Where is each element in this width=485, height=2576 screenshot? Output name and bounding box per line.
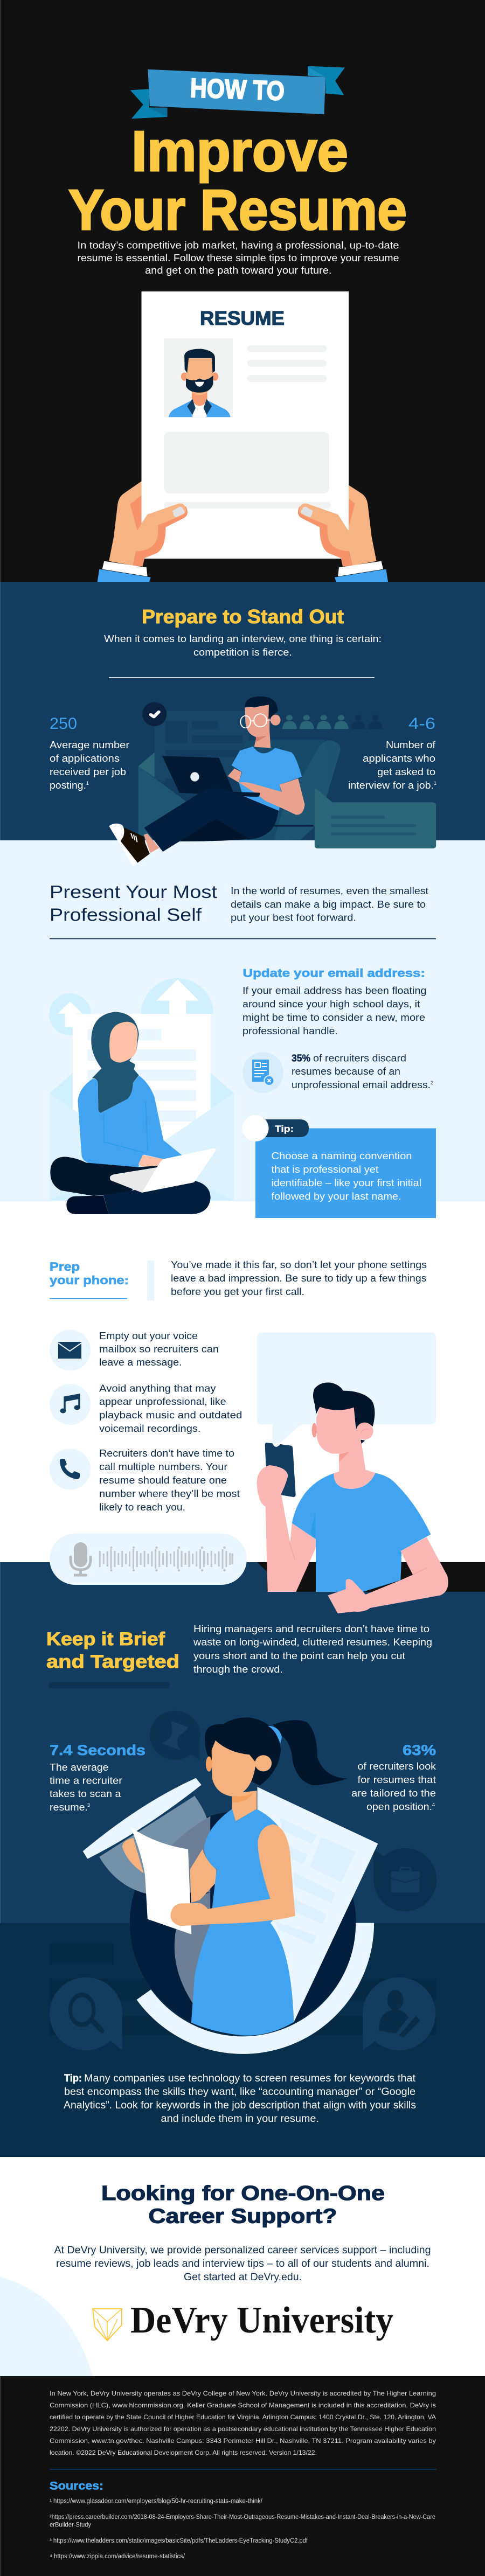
stat: 250: posting. <box>50 780 86 791</box>
intro text: In the world of resumes, even the smallest <box>231 886 428 896</box>
illustration: email envelope and woman <box>49 978 234 1214</box>
legal text <box>50 2390 436 2456</box>
stat: 250 <box>50 715 129 791</box>
intro text <box>193 1624 432 1675</box>
stat: 250: 1 <box>86 781 89 786</box>
stat text: 35%: 35% <box>292 1053 310 1063</box>
illustration: man with laptop <box>109 697 436 866</box>
bubble icons: search and candidate <box>50 1978 435 2050</box>
heading: Prepare to Stand Out <box>142 605 344 628</box>
intro text: competition is fierce. <box>193 647 292 658</box>
subheading: your phone: <box>50 1273 129 1287</box>
icon: candidate bubble <box>363 1978 435 2050</box>
legal text: Commission, www.tn.gov/thec. Nashville Campus: 3343 Perimeter Hill Dr., Nashville, TN 37211. Program availability varies by <box>50 2437 436 2445</box>
ribbon banner <box>130 66 345 119</box>
tip card <box>242 1115 436 1218</box>
heading: Professional Self <box>50 905 202 924</box>
stat: 63%: are tailored to the <box>351 1788 436 1799</box>
stat: 4-6: 4-6 <box>408 715 435 733</box>
item: music <box>50 1383 242 1434</box>
stat: 63% <box>351 1742 436 1812</box>
hourglass shape <box>83 1778 210 2004</box>
illustration: woman with resume <box>83 1711 436 2054</box>
tip text: best encompass the skills they want, like “accounting manager” or “Google <box>64 2086 415 2098</box>
check badge <box>142 702 167 726</box>
stat: 63%: of recruiters look <box>358 1761 436 1772</box>
panel: present your most professional self <box>0 840 485 1201</box>
stat text: 35%: 2 <box>431 1080 433 1085</box>
sources heading: Sources: <box>50 2480 103 2493</box>
ring arc <box>137 1923 374 2054</box>
sources list <box>50 2498 435 2560</box>
tip card: Tip: <box>275 1124 294 1134</box>
stat: 63%: 4 <box>432 1802 435 1807</box>
stat: 7.4 seconds: 3 <box>87 1802 90 1808</box>
tip text: Tip: <box>64 2073 82 2084</box>
decorative corner shape <box>0 2276 93 2376</box>
panel: header <box>68 66 407 582</box>
tip text: Many companies use technology to screen resumes for keywords that <box>84 2073 416 2084</box>
logo: DeVry University: DeVry University <box>130 2300 393 2341</box>
body text: If your email address has been floating <box>242 985 427 996</box>
item: voicemail: Empty out your voice <box>99 1331 198 1341</box>
intro text: through the crowd. <box>193 1664 283 1675</box>
intro text: and get on the path toward your future. <box>145 265 332 276</box>
heading <box>101 2182 385 2228</box>
tip card: that is professional yet <box>272 1164 378 1175</box>
heading: Present Your Most <box>50 882 217 902</box>
voice message bar <box>50 1534 247 1585</box>
stat: 4-6: Number of <box>386 740 436 750</box>
heading: Looking for One-On-One <box>101 2182 385 2205</box>
stat: 4-6: interview for a job. <box>348 780 434 791</box>
item: music: Avoid anything that may <box>99 1383 216 1394</box>
avatar portrait <box>169 349 231 417</box>
title: Your Resume <box>68 178 407 242</box>
stat: 7.4 seconds: resume. <box>50 1802 88 1813</box>
stat: 63%: for resumes that <box>358 1774 436 1785</box>
applicant row <box>282 715 383 729</box>
icon: hourglass bubble <box>150 1711 200 1760</box>
intro text: waste on long-winded, cluttered resumes. Keeping <box>193 1637 432 1647</box>
item: voicemail: mailbox so recruiters can <box>99 1343 219 1354</box>
stat: 250: 250 <box>50 715 77 733</box>
stat text: 35%: of recruiters discard <box>313 1053 406 1063</box>
stat: 4-6 <box>348 715 436 791</box>
heading <box>46 1629 179 1688</box>
intro text: Hiring managers and recruiters don’t have time to <box>193 1624 429 1634</box>
resume paper: RESUME <box>200 307 285 329</box>
legal text: In New York, DeVry University operates as DeVry College of New York. DeVry University is accredited by The Higher Learning <box>50 2390 436 2397</box>
block: keep it brief text <box>46 1624 436 1813</box>
tip card: Choose a naming convention <box>272 1151 412 1161</box>
hands holding resume <box>98 481 388 582</box>
body text: At DeVry University, we provide personalized career services support – including <box>54 2245 431 2256</box>
waveform <box>100 1549 232 1569</box>
item: phone number: Recruiters don’t have time to <box>99 1448 234 1459</box>
intro text: You’ve made it this far, so don’t let your phone settings <box>171 1259 427 1270</box>
panel: footer <box>0 2376 485 2576</box>
panel: keep it brief background <box>0 1562 485 2157</box>
woman figure <box>50 1012 216 1214</box>
icon: resume rejected <box>242 1052 283 1093</box>
stat: 63%: open position. <box>366 1801 432 1812</box>
tip card: identifiable – like your first initial <box>272 1178 421 1188</box>
man figure <box>109 697 305 866</box>
tip text: Analytics”. Look for keywords in the job description that align with your skills <box>64 2100 416 2111</box>
heading: Keep it Brief <box>46 1629 165 1649</box>
intro text <box>171 1259 427 1297</box>
block: update your email address <box>242 967 436 1218</box>
item: phone number <box>50 1448 240 1513</box>
dark circle <box>130 1811 356 2035</box>
heading: and Targeted <box>46 1652 179 1672</box>
stat text: 35% <box>292 1053 433 1090</box>
stat: 63%: 63% <box>403 1742 436 1758</box>
intro text: In today’s competitive job market, having a professional, up-to-date <box>78 240 399 251</box>
item: phone number: likely to reach you. <box>99 1502 185 1513</box>
title: Improve <box>131 120 348 183</box>
item: phone number: call multiple numbers. Your <box>99 1461 227 1472</box>
intro text: details can make a big impact. Be sure to <box>231 899 426 910</box>
body text: resume reviews, job leads and interview tips – to all of our students and alumni. <box>56 2258 429 2269</box>
body text: Get started at DeVry.edu. <box>184 2272 302 2283</box>
item: voicemail <box>50 1329 219 1370</box>
tip card: followed by your last name. <box>272 1191 401 1202</box>
stat: 7.4 seconds: 7.4 Seconds <box>50 1742 146 1758</box>
item: phone number: resume should feature one <box>99 1475 227 1486</box>
sources list: ³ https://www.theladders.com/static/images/basicSite/pdfs/TheLadders-EyeTracking-StudyC2.pdf <box>50 2538 308 2544</box>
body text: might be time to consider a new, more <box>242 1012 425 1023</box>
heading: Career Support? <box>149 2205 337 2228</box>
legal text: certified to operate by the State Council of Higher Education for Virginia. Arlington Campus: 1400 Crystal Dr., Ste. 120, Arlington, VA <box>50 2413 436 2421</box>
icon: briefcase bubble <box>373 1848 436 1911</box>
body text: around since your high school days, it <box>242 999 420 1009</box>
sources list: ¹ https://www.glassdoor.com/employers/blog/50-hr-recruiting-stats-make-think/ <box>50 2498 263 2505</box>
stat: 250: Average number <box>50 740 129 750</box>
arrow circles <box>49 978 213 1035</box>
intro text <box>231 886 428 923</box>
stat: 4-6: get asked to <box>377 767 435 777</box>
item: music: voicemail recordings. <box>99 1423 200 1434</box>
illustration: man with phone <box>257 1333 448 1613</box>
stat: 7.4 seconds: takes to scan a <box>50 1788 121 1799</box>
item: music: appear unprofessional, like <box>99 1396 226 1407</box>
stat text: 35%: unprofessional email address. <box>292 1080 431 1090</box>
tip text: and include them in your resume. <box>161 2113 319 2125</box>
heading <box>50 882 217 924</box>
legal text: Commission (HLC), www.hlcommission.org. Keller Graduate School of Management is included in this accreditation. DeVry is <box>50 2401 436 2409</box>
icon: magnifier bubble <box>50 1978 122 2050</box>
subheading: Update your email address: <box>242 967 425 979</box>
body text <box>242 985 427 1036</box>
stat: 250: of applications <box>50 753 120 764</box>
man figure <box>257 1382 448 1613</box>
panel: prepare to stand out <box>0 582 485 840</box>
intro text <box>78 240 399 276</box>
speech bubble <box>315 789 436 848</box>
stat: 4-6: applicants who <box>363 753 435 764</box>
icon: microphone <box>71 1542 91 1575</box>
panel: white phone section background <box>0 1201 485 1562</box>
intro text: put your best foot forward. <box>231 913 356 923</box>
woman figure <box>122 1717 348 2036</box>
panel: career support <box>0 2157 485 2376</box>
stat: 7.4 seconds <box>50 1742 146 1813</box>
sources list: erBuilder-Study <box>50 2522 91 2529</box>
speech bubble <box>257 1333 436 1444</box>
stat text: 35%: resumes because of an <box>292 1066 400 1077</box>
item: phone number: number where they’ll be most <box>99 1488 240 1499</box>
stat: 7.4 seconds: time a recruiter <box>50 1776 122 1786</box>
item: voicemail: leave a message. <box>99 1357 182 1368</box>
sources list: ²https://press.careerbuilder.com/2018-08-24-Employers-Share-Their-Most-Outrageous-Resume-Mistakes-and-Instant-Deal-Breakers-in-a-New-Care <box>50 2514 435 2521</box>
large resume sheet <box>257 1787 378 2022</box>
subheading <box>50 1260 129 1299</box>
tip text <box>64 2073 416 2125</box>
stat: 7.4 seconds: The average <box>50 1762 109 1773</box>
intro text <box>104 633 382 658</box>
intro text: before you get your first call. <box>171 1286 304 1297</box>
body text <box>54 2245 431 2283</box>
envelope back and letter <box>50 1014 234 1200</box>
body text: professional handle. <box>242 1026 338 1036</box>
stat: 250: received per job <box>50 767 126 777</box>
legal text: 22202. DeVry University is authorized for operation as a postsecondary educational institution by the Tennessee Higher Education <box>50 2425 436 2433</box>
intro text: When it comes to landing an interview, one thing is certain: <box>104 633 382 644</box>
ribbon text: HOW TO <box>190 73 285 106</box>
intro text: leave a bad impression. Be sure to tidy up a few things <box>171 1273 427 1284</box>
intro text: resume is essential. Follow these simple tips to improve your resume <box>78 253 399 263</box>
title <box>68 120 407 242</box>
subheading: Prep <box>50 1260 80 1273</box>
sources list: ⁴ https://www.zippia.com/advice/resume-statistics/ <box>50 2553 185 2560</box>
intro text: yours short and to the point can help you cut <box>193 1651 405 1661</box>
resume paper <box>141 291 349 559</box>
legal text: location. ©2022 DeVry Educational Development Corp. All rights reserved. Version 1/13/22. <box>50 2449 317 2456</box>
panel: prep your phone <box>50 1259 427 1513</box>
stat: 4-6: 1 <box>434 781 436 786</box>
item: music: playback music and outdated <box>99 1410 242 1421</box>
